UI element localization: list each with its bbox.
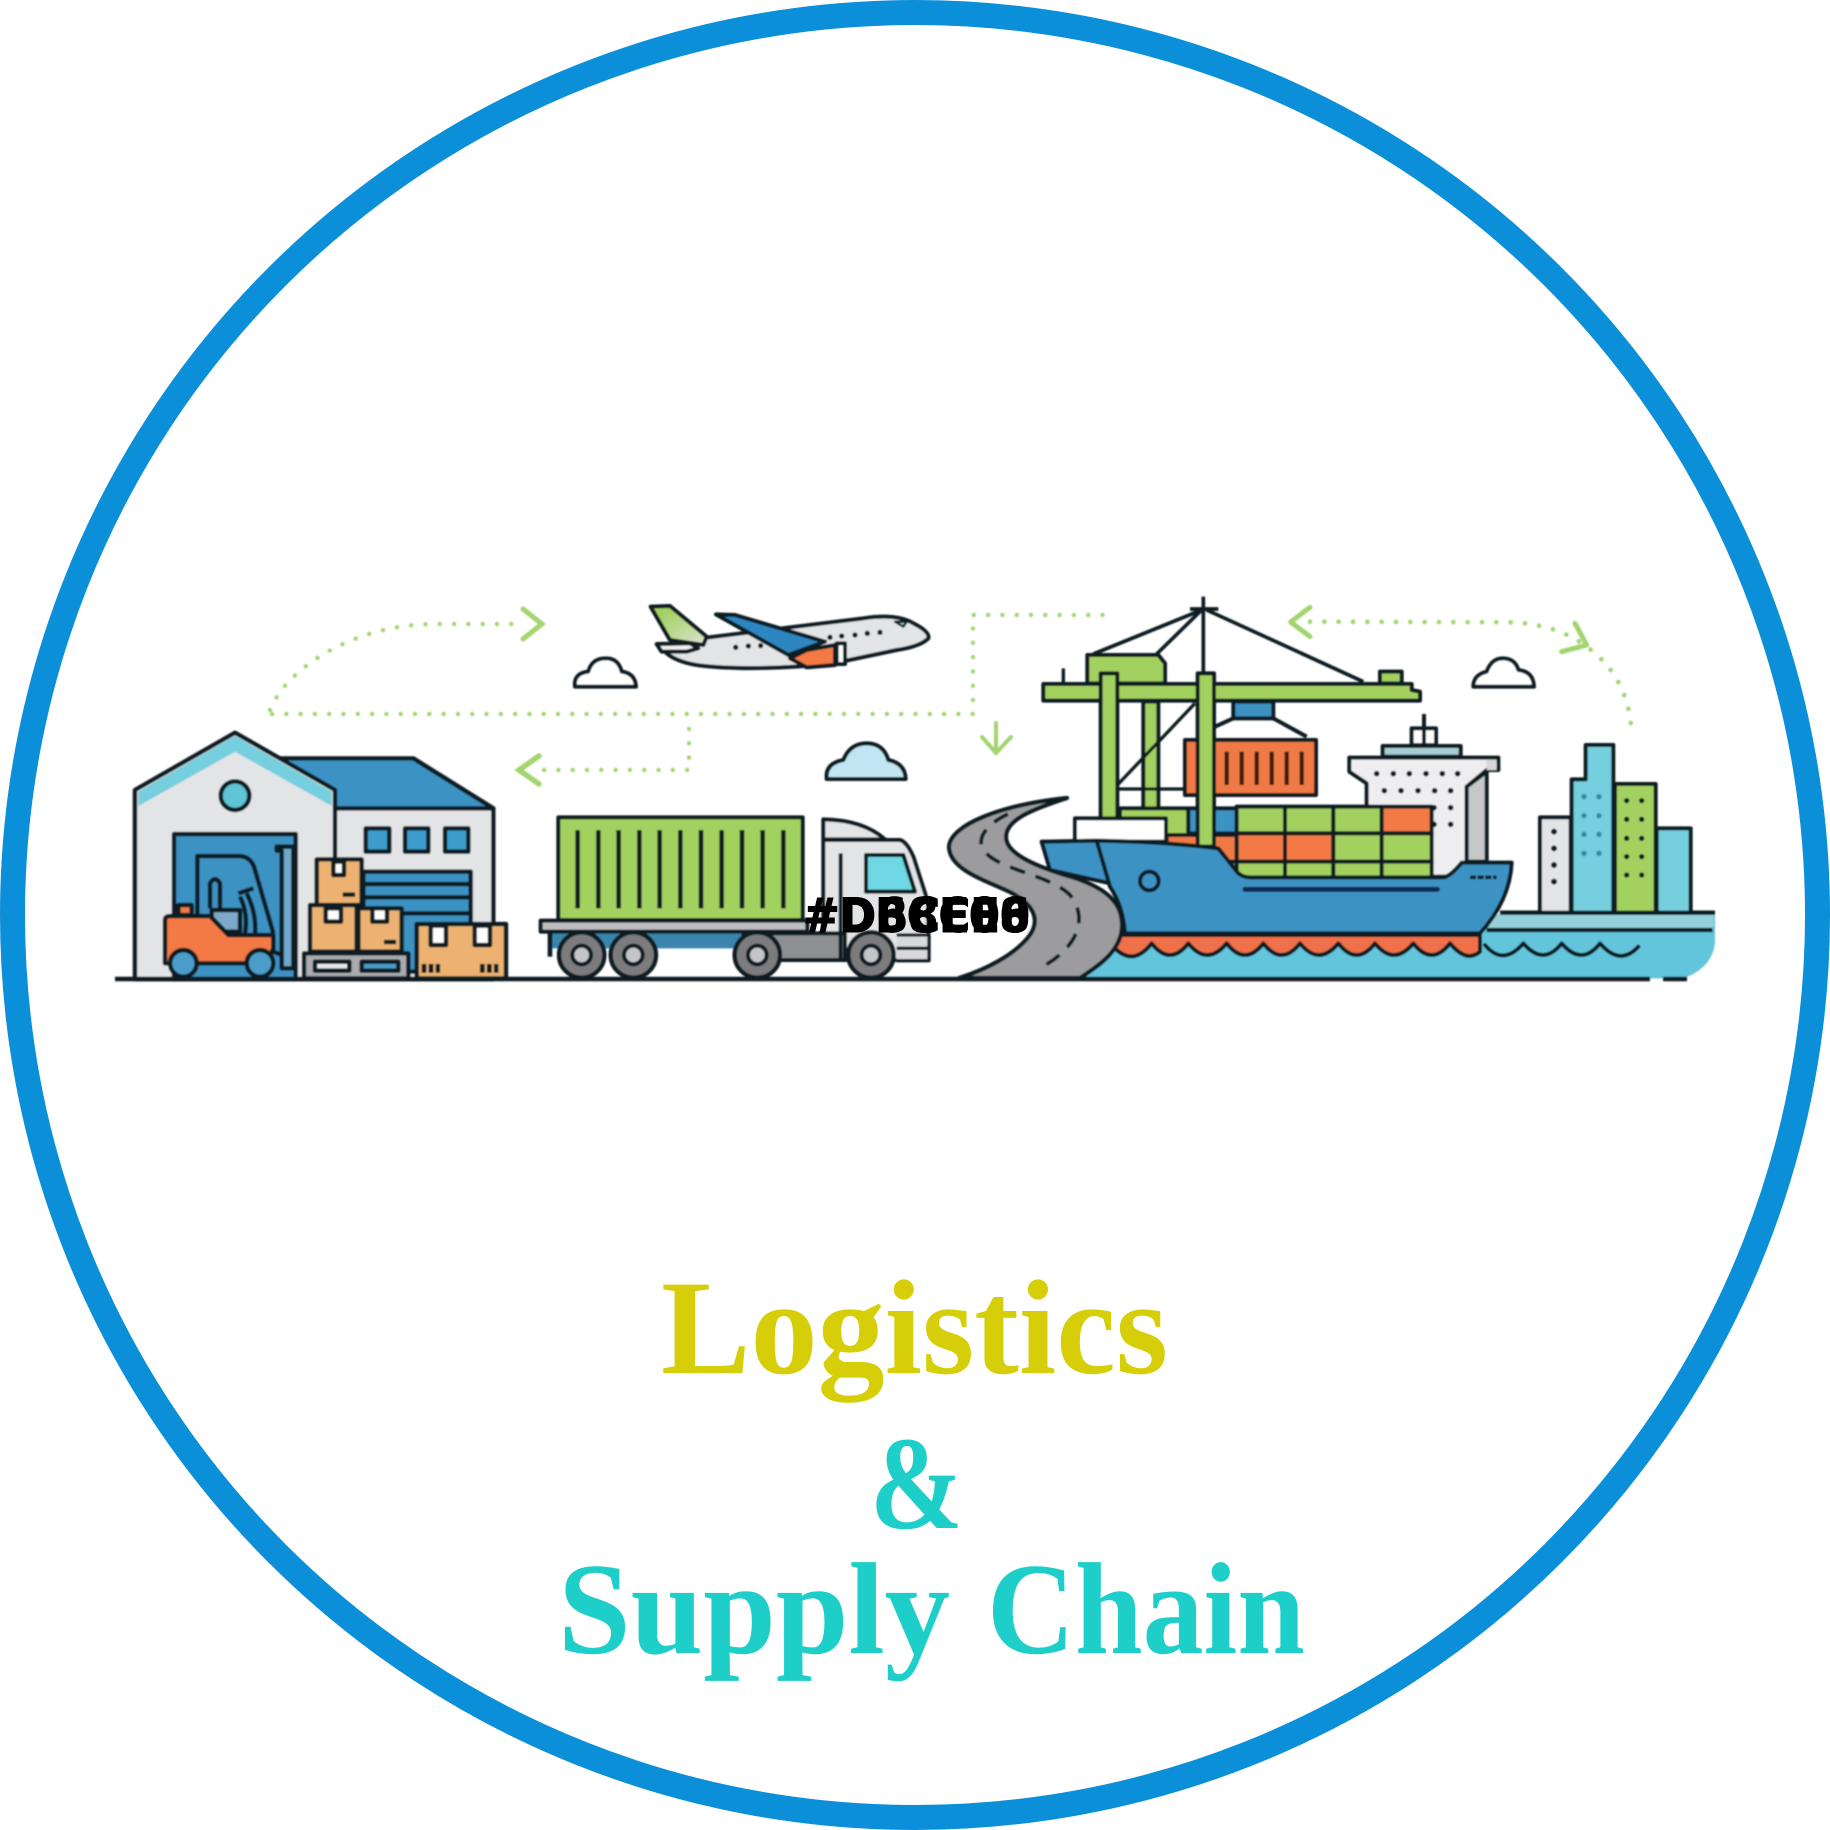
warehouse with forklift and boxes [135,733,506,979]
quay band [1487,914,1713,930]
cloud: left [575,658,636,687]
route: branch to left [541,729,689,770]
arrowhead: right [523,609,542,639]
truck cab [823,819,885,839]
title [558,1254,1305,1682]
route: long horizontal with riser [272,615,1115,714]
arrowhead: left chevron [1291,607,1310,637]
crane front legs [1101,673,1214,847]
plane, truck, clouds [541,606,929,978]
arrowhead: left [519,756,539,784]
crane boom [1043,684,1420,701]
trolley [1233,702,1273,718]
warehouse annex [280,758,493,979]
red waterline with scallops [1115,935,1480,956]
title line: ampersand: & [870,1409,963,1557]
truck container [558,817,803,920]
container ship and port crane [1042,597,1512,956]
illustration: logistics scene [115,597,1715,979]
forklift [165,847,293,977]
truck chassis [550,933,743,948]
water and quay [1080,607,1715,978]
crane rear leg and bracing [1143,702,1158,812]
cardboard boxes and pallet [304,859,506,978]
route: curved arrow over skyline [1310,622,1632,735]
container stack [1120,807,1432,878]
ship superstructure [1349,714,1498,877]
title line: Supply Chain: Supply [558,1537,950,1682]
winding road [949,798,1122,978]
waves [1485,943,1638,956]
truck [541,817,929,978]
skyline buildings [1540,745,1691,913]
crane cables [1093,597,1363,682]
cloud: right [1473,658,1534,687]
hanging orange container [1185,740,1316,795]
road centre dashes [981,814,1079,968]
white deck block [1075,818,1166,842]
title line: Supply Chain: Chain [987,1537,1305,1682]
arrowhead: right chevron [1562,623,1587,652]
ship hull [1042,841,1512,933]
title line: Logistics: Logistics [661,1254,1168,1403]
crane cab [1087,655,1165,683]
ground line [115,977,1687,981]
dotted route arrows [270,609,1115,784]
overlapping colour code labels: #DBCE06 [803,889,1030,944]
overlapping colour code labels: #DB8CE0 [803,889,1030,944]
title line: Supply Chain [558,1537,1305,1682]
warehouse gable [135,733,335,979]
arrowhead: down [982,723,1011,753]
truck wheels [559,932,894,978]
airplane [651,606,928,668]
overlapping colour code labels: #D6CE08 [803,889,1030,944]
cloud: centre blue [827,743,906,779]
route: curved arrow over warehouse [270,624,523,710]
